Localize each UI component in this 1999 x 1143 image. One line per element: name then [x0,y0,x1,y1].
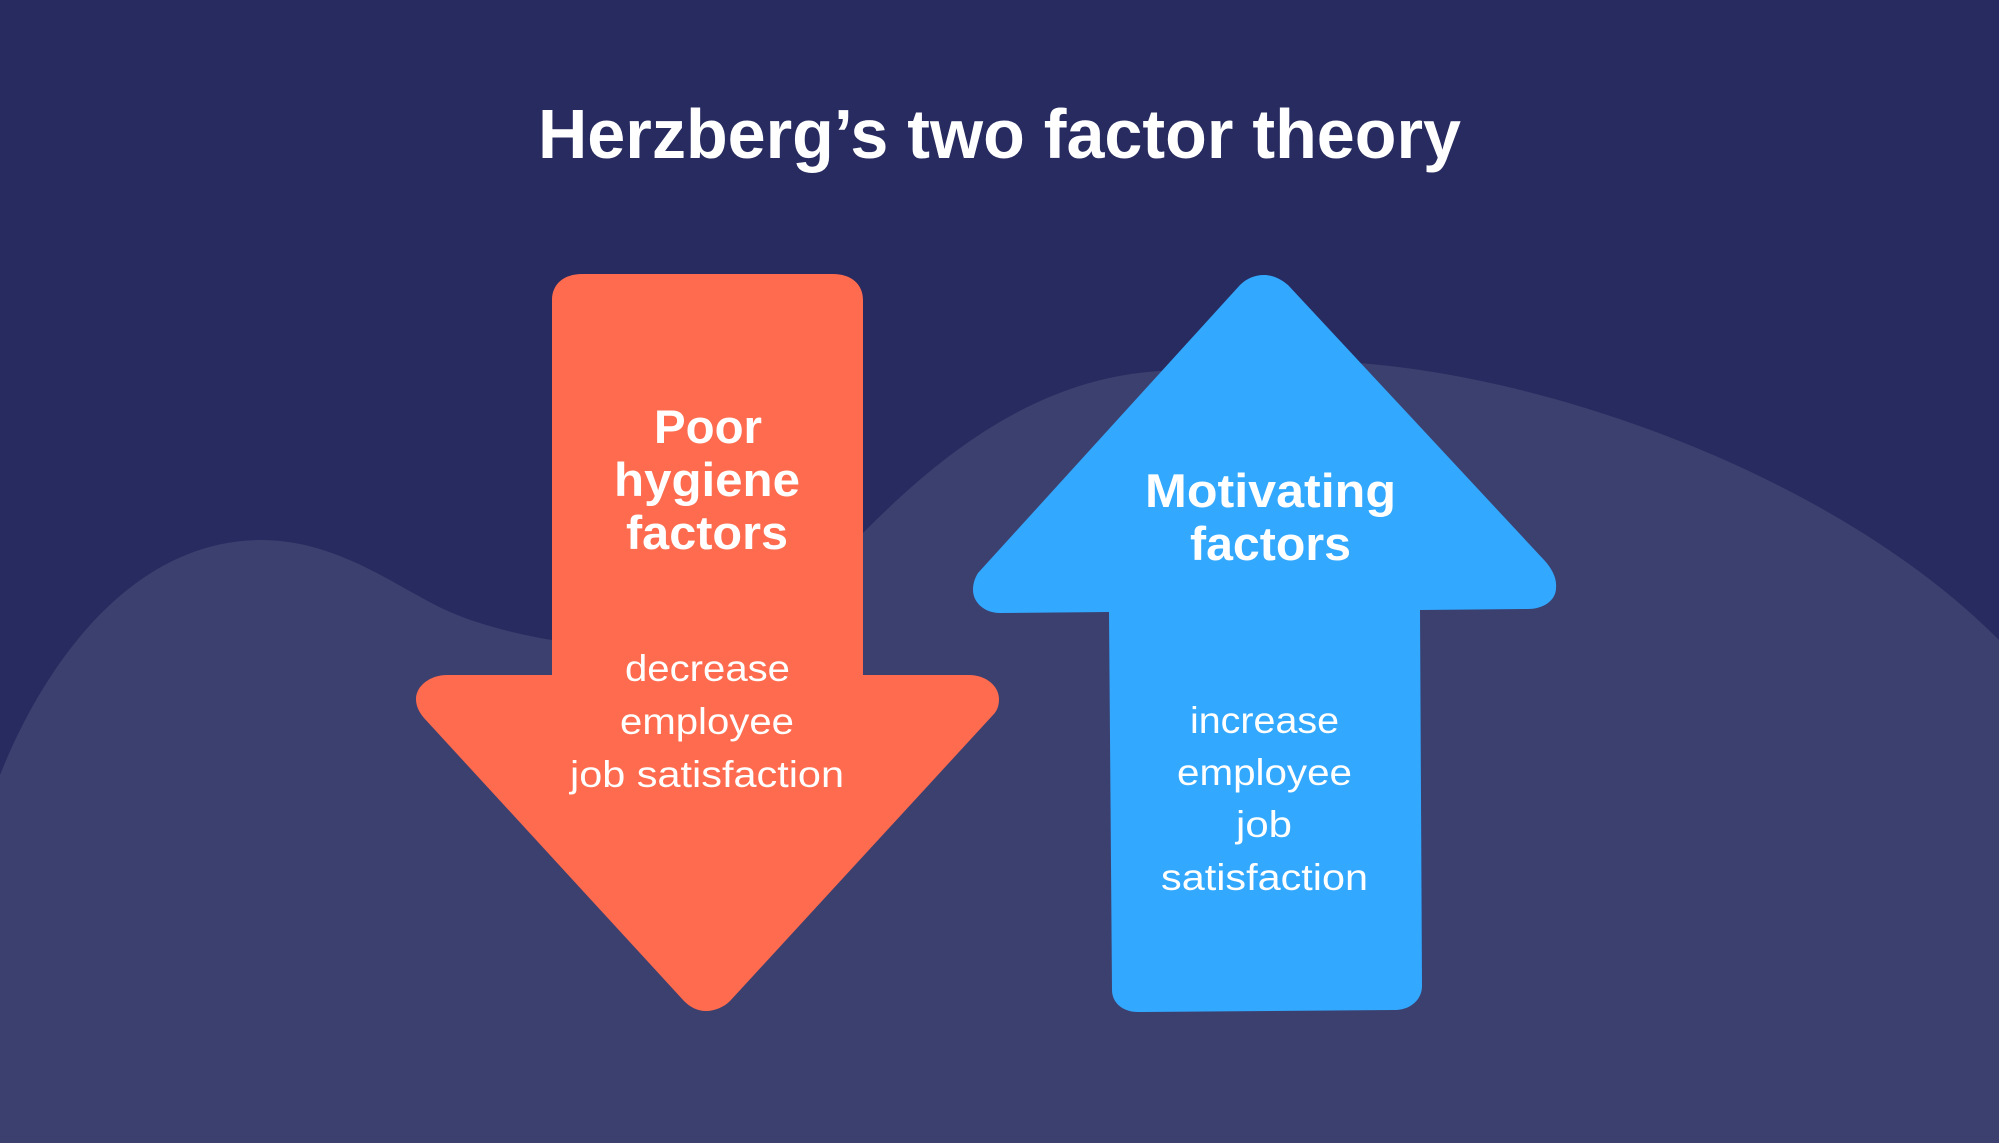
arrow shape: down [416,274,999,1011]
background hills [0,362,1999,1143]
heading: poor hygiene factors: hygiene [614,453,800,506]
text: decrease employee job satisfaction: job satisfaction [569,754,844,795]
heading: poor hygiene factors: Poor [654,400,762,453]
heading: poor hygiene factors [614,400,800,559]
text: increase employee job satisfaction: employee [1177,752,1352,793]
heading: motivating factors: Motivating [1145,464,1396,517]
panel: poor hygiene factors down arrow [416,274,999,1011]
text: increase employee job satisfaction: job [1235,804,1292,845]
heading: motivating factors [1145,464,1396,570]
arrow shape: up [973,275,1556,1012]
heading: motivating factors: factors [1190,517,1351,570]
heading: poor hygiene factors: factors [626,506,788,559]
text: decrease employee job satisfaction [569,648,844,795]
title: Herzberg’s two factor theory [538,95,1461,173]
text: increase employee job satisfaction: satisfaction [1161,857,1368,898]
text: decrease employee job satisfaction: employee [620,701,794,742]
text: increase employee job satisfaction: increase [1190,700,1339,741]
text: increase employee job satisfaction [1161,700,1368,898]
text: decrease employee job satisfaction: decrease [625,648,790,689]
panel: motivating factors up arrow [973,275,1556,1012]
